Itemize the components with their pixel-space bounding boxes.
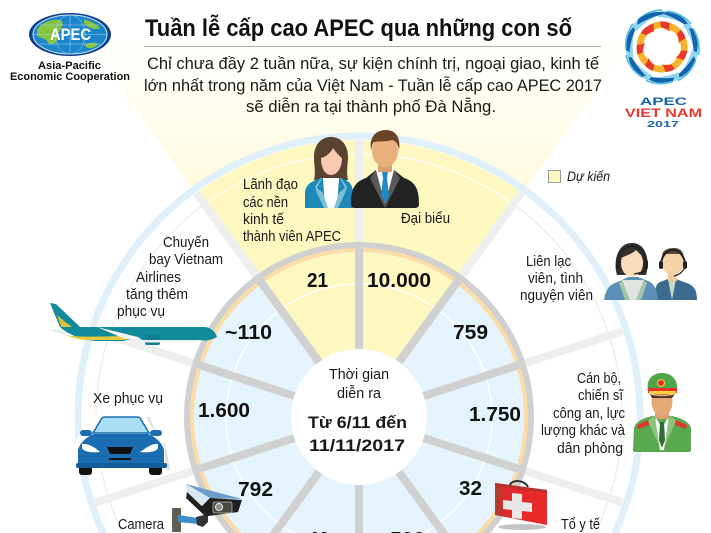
- APEC Viet Nam 2017 logo: APEC: [640, 96, 687, 108]
- intro paragraph: sẽ diễn ra tại thành phố Đà Nẵng.: [246, 97, 496, 116]
- label: liaison: [520, 254, 593, 304]
- icon: security camera: [172, 484, 242, 532]
- label: flights: phục vụ: [117, 304, 165, 320]
- label: liaison: viên, tình: [528, 271, 583, 287]
- centre: event dates: 11/11/2017: [309, 436, 405, 455]
- centre: event dates: Thời gian: [329, 367, 389, 383]
- icon: male delegate: [351, 130, 419, 208]
- intro paragraph: lớn nhất trong năm của Việt Nam - Tuần lễ cấp cao APEC 2017: [144, 76, 602, 95]
- label: liaison: nguyện viên: [520, 288, 593, 304]
- label: security forces: lượng khác và: [541, 423, 626, 439]
- label: flights: Chuyến: [163, 235, 209, 251]
- label: security forces: [541, 371, 626, 457]
- light beam behind the wheel: [85, 40, 633, 417]
- APEC Viet Nam 2017 logo: 2017: [647, 119, 679, 129]
- label: leaders: thành viên APEC: [243, 229, 341, 245]
- intro paragraph: Chỉ chưa đầy 2 tuần nữa, sự kiện chính trị, ngoại giao, kinh tế: [147, 54, 600, 73]
- value: 1.750: 1.750: [469, 404, 521, 426]
- label: leaders: các nền: [243, 195, 288, 211]
- centre: event dates: [308, 367, 407, 455]
- value: 792: 792: [238, 479, 273, 501]
- icon: police officer: [633, 373, 691, 452]
- icon: liaison staff with headsets: [604, 243, 697, 300]
- intro paragraph: [144, 54, 602, 116]
- centre: event dates: diễn ra: [337, 385, 382, 402]
- label: leaders: kinh tế: [243, 212, 284, 228]
- label: security forces: chiến sĩ: [578, 388, 624, 404]
- APEC logo: Asia-Pacific: [38, 60, 101, 72]
- label: flights: bay Vietnam: [149, 252, 223, 268]
- icon: Vietnam Airlines plane: [48, 303, 217, 345]
- title: Tuần lễ cấp cao APEC qua những con số: [145, 14, 572, 42]
- radial wheel chart: [78, 136, 640, 533]
- label: camera: Camera: [118, 517, 165, 533]
- legend: forecast: Dự kiến: [567, 169, 610, 184]
- value: 1.600: 1.600: [198, 400, 250, 422]
- legend: forecast: [548, 169, 610, 184]
- APEC logo: [10, 13, 130, 83]
- icon: female leader: [305, 137, 353, 208]
- label: liaison: Liên lạc: [526, 254, 571, 270]
- APEC logo: Economic Cooperation: [10, 71, 130, 83]
- APEC logo: APEC: [50, 26, 91, 44]
- value: 10.000: 10.000: [367, 270, 431, 292]
- label: service cars: Xe phục vụ: [93, 391, 163, 407]
- value: 21: 21: [307, 270, 328, 292]
- label: leaders: Lãnh đạo: [243, 177, 298, 193]
- icon: medical kit: [495, 481, 547, 530]
- label: delegates: Đại biểu: [401, 211, 450, 227]
- label: security forces: dân phòng: [557, 441, 623, 457]
- label: medical team: Tổ y tế: [561, 517, 600, 533]
- label: security forces: Cán bộ,: [577, 371, 621, 387]
- centre: event dates: Từ 6/11 đến: [308, 413, 407, 432]
- label: flights: Airlines: [136, 270, 181, 286]
- label: leaders: [243, 177, 341, 245]
- APEC Viet Nam 2017 logo: [618, 0, 710, 129]
- label: flights: tăng thêm: [126, 287, 188, 303]
- value: 32: 32: [459, 478, 482, 500]
- value: ~110: ~110: [225, 322, 272, 344]
- label: flights: [117, 235, 223, 320]
- value: 759: 759: [453, 322, 488, 344]
- icon: service car: [76, 415, 170, 475]
- label: security forces: công an, lực: [553, 406, 625, 422]
- APEC Viet Nam 2017 logo: VIET NAM: [625, 106, 702, 120]
